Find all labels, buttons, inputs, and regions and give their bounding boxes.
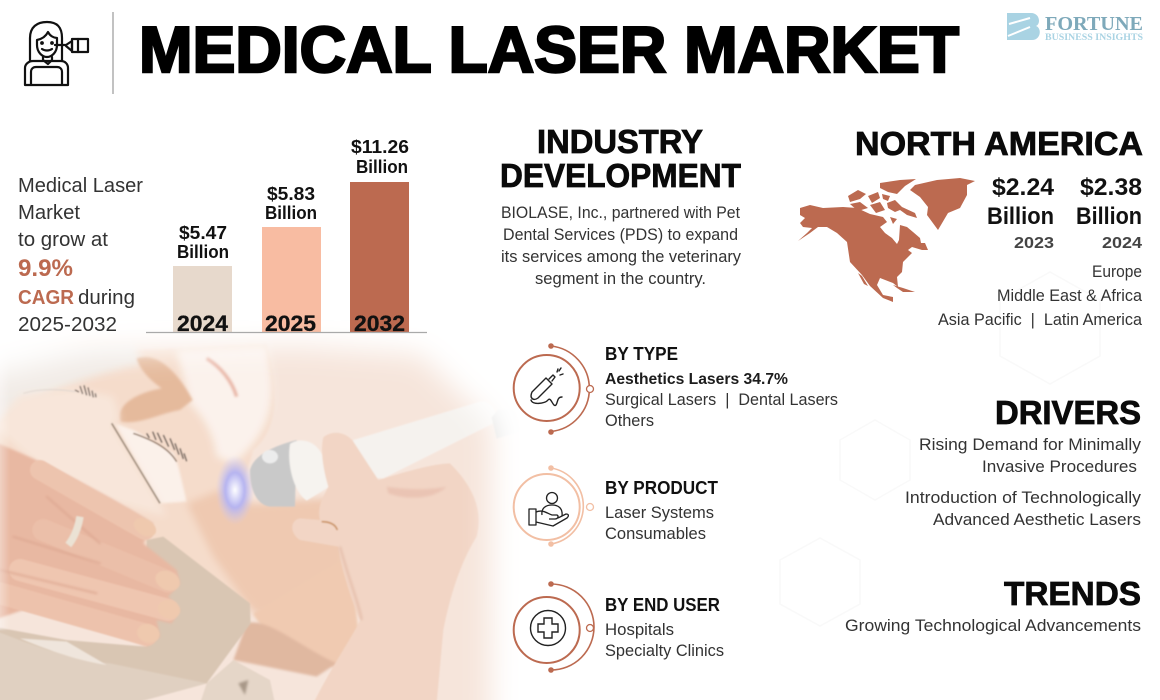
other regions: Asia Pacific | Latin America <box>938 311 1143 329</box>
ring <box>68 517 80 545</box>
bar 2025: 2025 <box>265 311 316 336</box>
bar 2032: $11.26 <box>351 136 409 157</box>
left hand <box>0 442 183 647</box>
bar 2024: $5.47 <box>179 222 227 243</box>
bar 2032: Billion <box>356 156 408 177</box>
panel: industry development <box>500 123 742 288</box>
text block: CAGR statement <box>18 175 143 336</box>
panel: trends: Growing Technological Advancements <box>845 617 1141 635</box>
face and skin <box>0 343 362 677</box>
value 2024: $2.38 <box>1080 174 1142 201</box>
bar 2024: Billion <box>177 241 229 262</box>
segment: by type: Aesthetics Lasers 34.7% <box>605 371 788 388</box>
logo: Fortune Business Insights: FORTUNE <box>1045 14 1143 35</box>
segment: by type <box>514 343 838 435</box>
segment: by end user: Specialty Clinics <box>605 642 724 660</box>
icon: hand holding person <box>514 465 594 547</box>
map: north america <box>798 178 975 302</box>
value 2024 <box>1076 174 1142 252</box>
value 2024: Billion <box>1076 203 1142 230</box>
text block: CAGR statement: 2025-2032 <box>18 314 117 336</box>
panel: industry development: INDUSTRY <box>537 123 703 160</box>
segment: by product: Consumables <box>605 525 706 543</box>
bar 2024 <box>173 222 232 336</box>
segment: by end user <box>514 581 724 673</box>
other regions: Middle East & Africa <box>997 287 1143 305</box>
segment: by product: Laser Systems <box>605 504 714 522</box>
bar 2024: 2024 <box>177 311 229 336</box>
eyelashes and brow line <box>23 358 237 503</box>
title: MEDICAL LASER MARKET <box>139 13 959 86</box>
panel: drivers <box>905 394 1142 529</box>
bar 2032 <box>350 136 409 336</box>
bar 2025: Billion <box>265 202 317 223</box>
panel: north america <box>798 125 1143 329</box>
panel: industry development: Dental Services (PDS) to expand <box>503 226 738 244</box>
panel: industry development: segment in the country. <box>535 270 706 288</box>
panel: drivers: Advanced Aesthetic Lasers <box>933 511 1141 529</box>
segment: by product: BY PRODUCT <box>605 478 718 498</box>
text block: CAGR statement: CAGR <box>18 287 75 309</box>
value 2023: Billion <box>987 203 1054 230</box>
value 2023 <box>987 174 1055 252</box>
segment: by type: Others <box>605 412 654 430</box>
right hand <box>292 433 479 700</box>
laser device <box>250 404 500 507</box>
other regions: Europe <box>1092 263 1142 281</box>
panel: drivers: DRIVERS <box>995 394 1141 431</box>
panel: trends <box>845 575 1141 635</box>
value 2023: 2023 <box>1014 235 1054 252</box>
towel <box>0 537 275 700</box>
panel: drivers: Introduction of Technologically <box>905 489 1142 507</box>
logo: Fortune Business Insights <box>1007 13 1143 43</box>
segment: by end user: Hospitals <box>605 621 674 639</box>
bar 2025 <box>262 183 321 336</box>
other regions <box>938 263 1143 329</box>
panel: industry development: BIOLASE, Inc., partnered with Pet <box>501 204 740 222</box>
icon: woman with laser device <box>25 22 88 85</box>
panel: drivers: Rising Demand for Minimally <box>919 436 1142 454</box>
bar 2025: $5.83 <box>267 183 315 204</box>
bar 2032: 2032 <box>354 311 405 336</box>
segment: by end user: BY END USER <box>605 595 720 615</box>
panel: trends: TRENDS <box>1004 575 1141 612</box>
text block: CAGR statement: 9.9% <box>18 255 73 282</box>
bar chart: market size <box>146 136 427 336</box>
logo: Fortune Business Insights: BUSINESS INSIGHTS <box>1045 33 1143 43</box>
text block: CAGR statement: Medical Laser <box>18 175 143 197</box>
icon: medical cross <box>514 581 594 673</box>
segment: by type: BY TYPE <box>605 344 678 364</box>
laser glow <box>217 458 252 522</box>
text block: CAGR statement: Market <box>18 202 80 224</box>
segment: by type: Surgical Lasers | Dental Lasers <box>605 391 838 409</box>
text block: CAGR statement: to grow at <box>18 229 108 251</box>
panel: drivers: Invasive Procedures <box>982 458 1137 476</box>
photo: laser treatment on face <box>0 336 503 700</box>
value 2024: 2024 <box>1102 235 1142 252</box>
panel: industry development: DEVELOPMENT <box>500 157 741 194</box>
text block: CAGR statement: during <box>78 287 135 309</box>
segment: by product <box>514 465 718 547</box>
panel: industry development: its services among the veterinary <box>501 248 742 266</box>
icon: laser pen <box>514 343 594 435</box>
value 2023: $2.24 <box>992 174 1055 201</box>
panel: north america: NORTH AMERICA <box>855 125 1143 162</box>
